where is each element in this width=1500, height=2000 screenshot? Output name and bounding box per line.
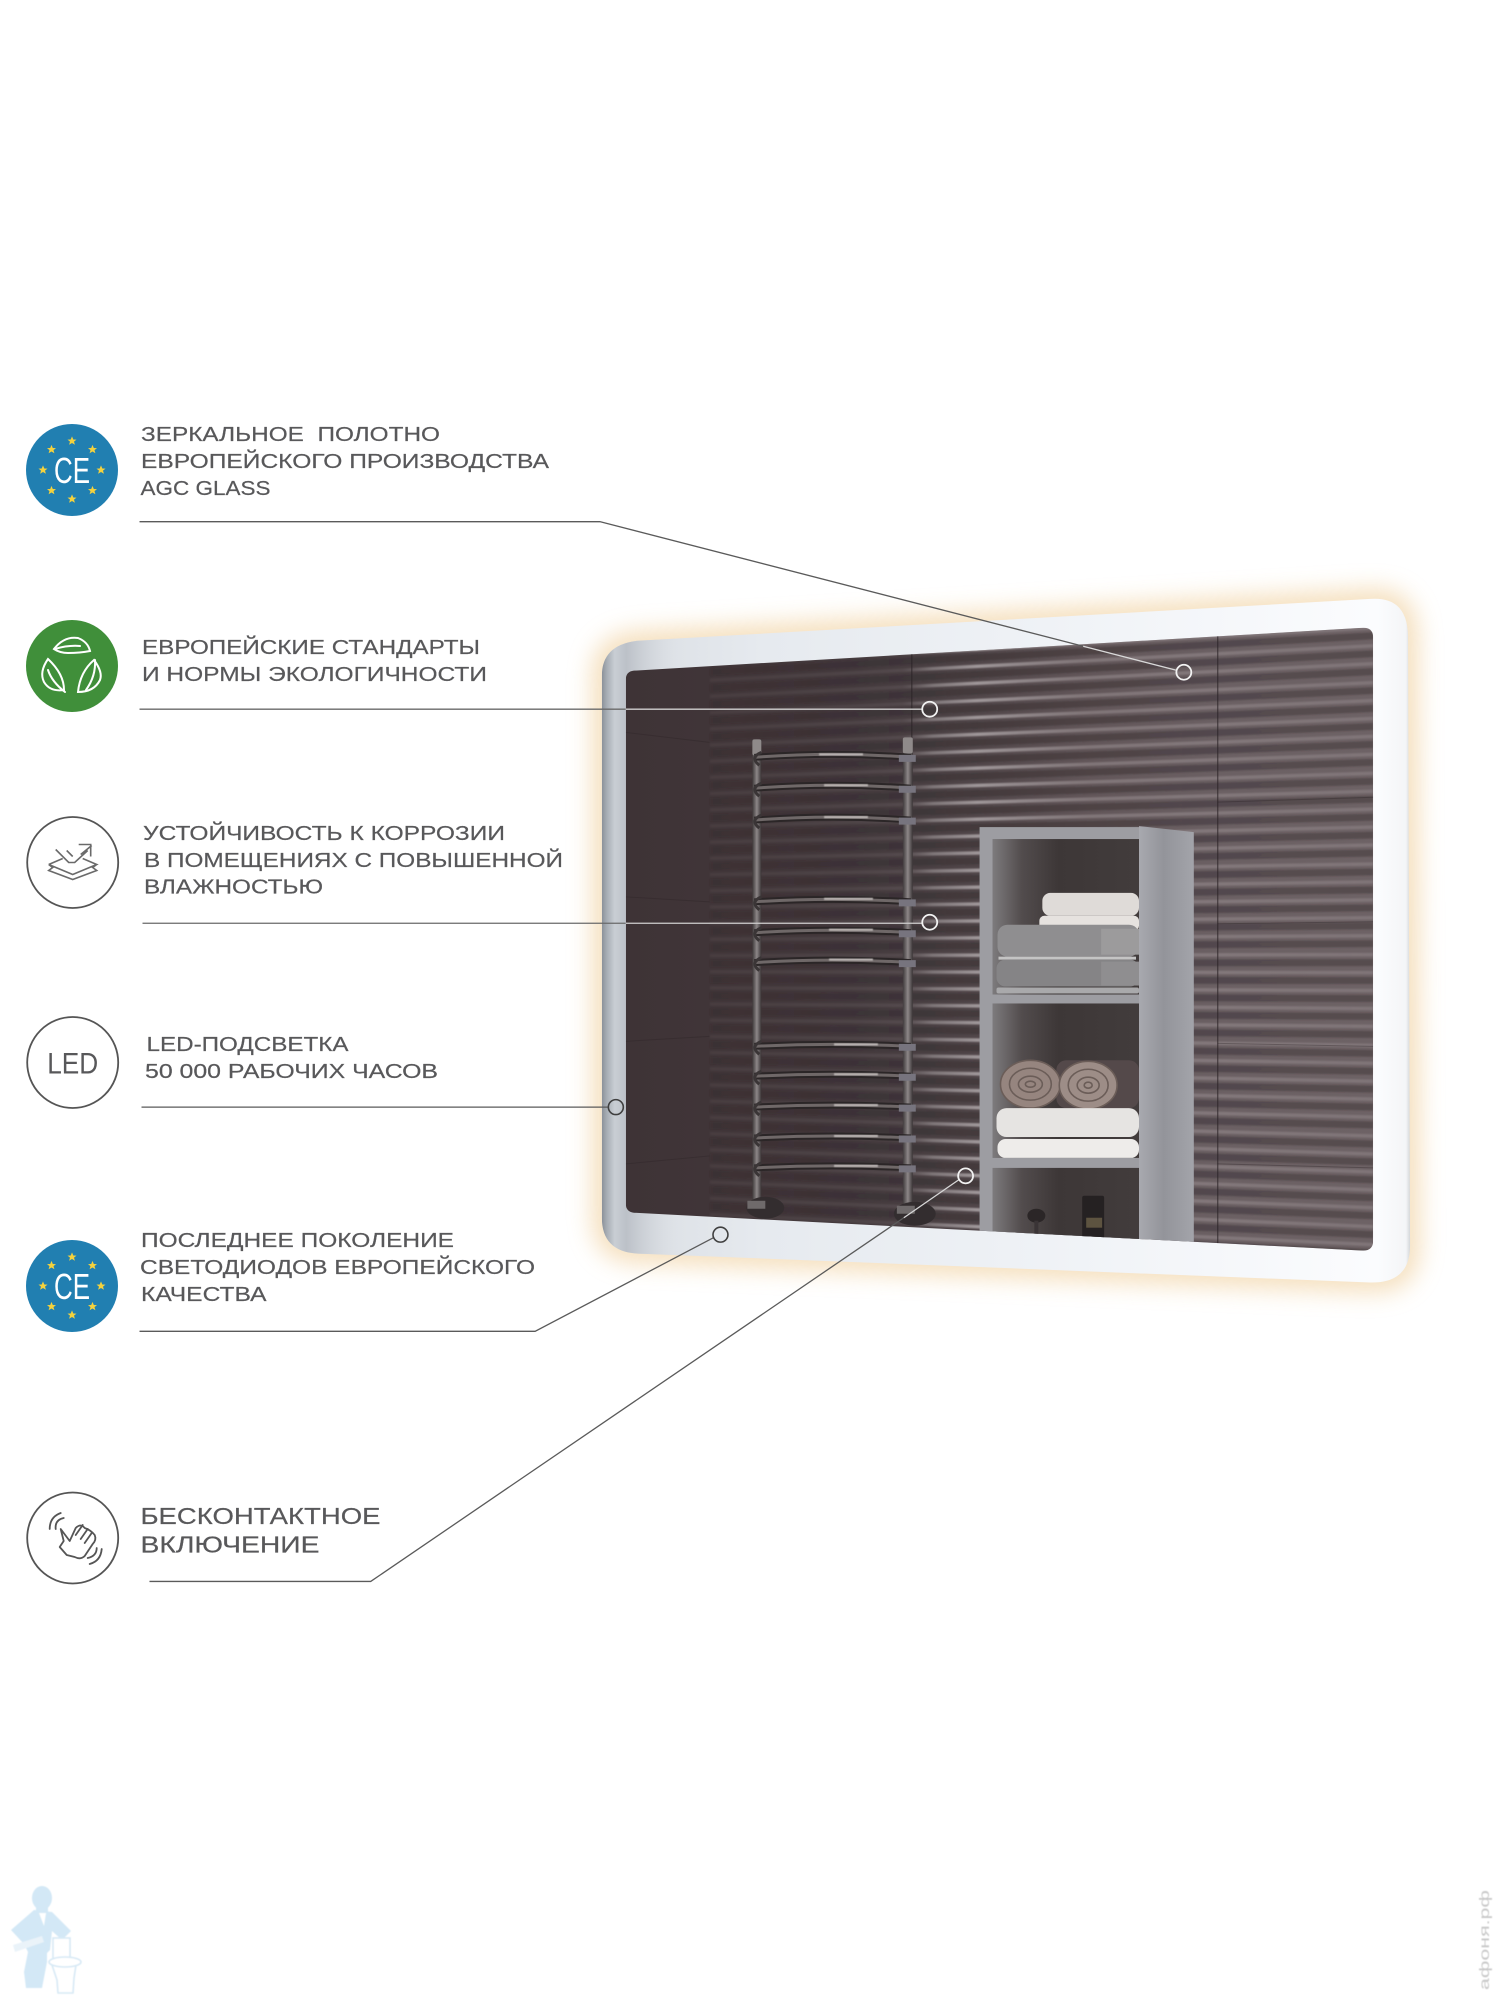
mirror with LED backlight [592, 589, 1420, 1292]
text: corrosion resistance: ВЛАЖНОСТЬЮ [144, 876, 323, 898]
text: eco standards [142, 635, 487, 686]
text: LED lifetime [145, 1034, 438, 1083]
text: corrosion resistance: В ПОМЕЩЕНИЯХ С ПОВЫШЕННОЙ [144, 848, 563, 872]
text: latest LEDs: КАЧЕСТВА [141, 1284, 267, 1306]
text: latest LEDs [140, 1230, 535, 1306]
text: touchless switch: ВКЛЮЧЕНИЕ [140, 1532, 320, 1558]
cosmetics [1082, 1196, 1104, 1241]
text: mirror glass: ЗЕРКАЛЬНОЕ ПОЛОТНО [141, 423, 440, 446]
icon: CE europe [26, 424, 118, 516]
text: LED lifetime: LED-ПОДСВЕТКА [146, 1034, 349, 1056]
text: LED lifetime: 50 000 РАБОЧИХ ЧАСОВ [145, 1061, 438, 1083]
callout lines and markers [140, 522, 1191, 1581]
icon: LED: LED [47, 1048, 98, 1080]
icon: CE europe: CE [54, 450, 90, 491]
warm LED glow [592, 589, 1420, 1292]
watermark: site name: афоня.рф [1476, 1890, 1492, 1990]
shelving unit [980, 826, 1194, 1256]
watermark: plumber figure [11, 1886, 81, 1993]
text: corrosion resistance [143, 821, 563, 898]
callout line 1 [140, 522, 1191, 680]
callout line 5 [140, 1227, 728, 1331]
icon: corrosion layers [27, 817, 118, 908]
callout line 2 [140, 702, 937, 717]
mirror reflection: tiled wall [626, 623, 1373, 1256]
icon: eco leaves [26, 620, 118, 712]
text: latest LEDs: ПОСЛЕДНЕЕ ПОКОЛЕНИЕ [141, 1230, 454, 1252]
icon: CE europe second: CE [54, 1266, 90, 1307]
text: corrosion resistance: УСТОЙЧИВОСТЬ К КОРРОЗИИ [143, 821, 505, 845]
callout line 3 [142, 915, 937, 930]
frame shading on left side [602, 640, 656, 1254]
callout line 4 [142, 1100, 623, 1115]
rolled towels [1056, 1060, 1139, 1108]
towel radiator [746, 737, 936, 1226]
text: eco standards: И НОРМЫ ЭКОЛОГИЧНОСТИ [142, 663, 487, 686]
folded towels [1042, 893, 1139, 916]
callout line 6 [149, 1168, 973, 1581]
text: mirror glass: ЕВРОПЕЙСКОГО ПРОИЗВОДСТВА [141, 449, 549, 473]
icon: touchless hand [27, 1492, 118, 1584]
mirror frame [602, 599, 1410, 1283]
text: latest LEDs: СВЕТОДИОДОВ ЕВРОПЕЙСКОГО [140, 1255, 535, 1279]
text: touchless switch: БЕСКОНТАКТНОЕ [140, 1503, 380, 1529]
icon: LED [27, 1017, 118, 1108]
text: touchless switch [140, 1503, 380, 1558]
text: mirror glass: AGC GLASS [140, 477, 270, 500]
text: mirror glass [140, 423, 549, 500]
text: eco standards: ЕВРОПЕЙСКИЕ СТАНДАРТЫ [142, 635, 480, 659]
icon: CE europe second [26, 1240, 118, 1332]
